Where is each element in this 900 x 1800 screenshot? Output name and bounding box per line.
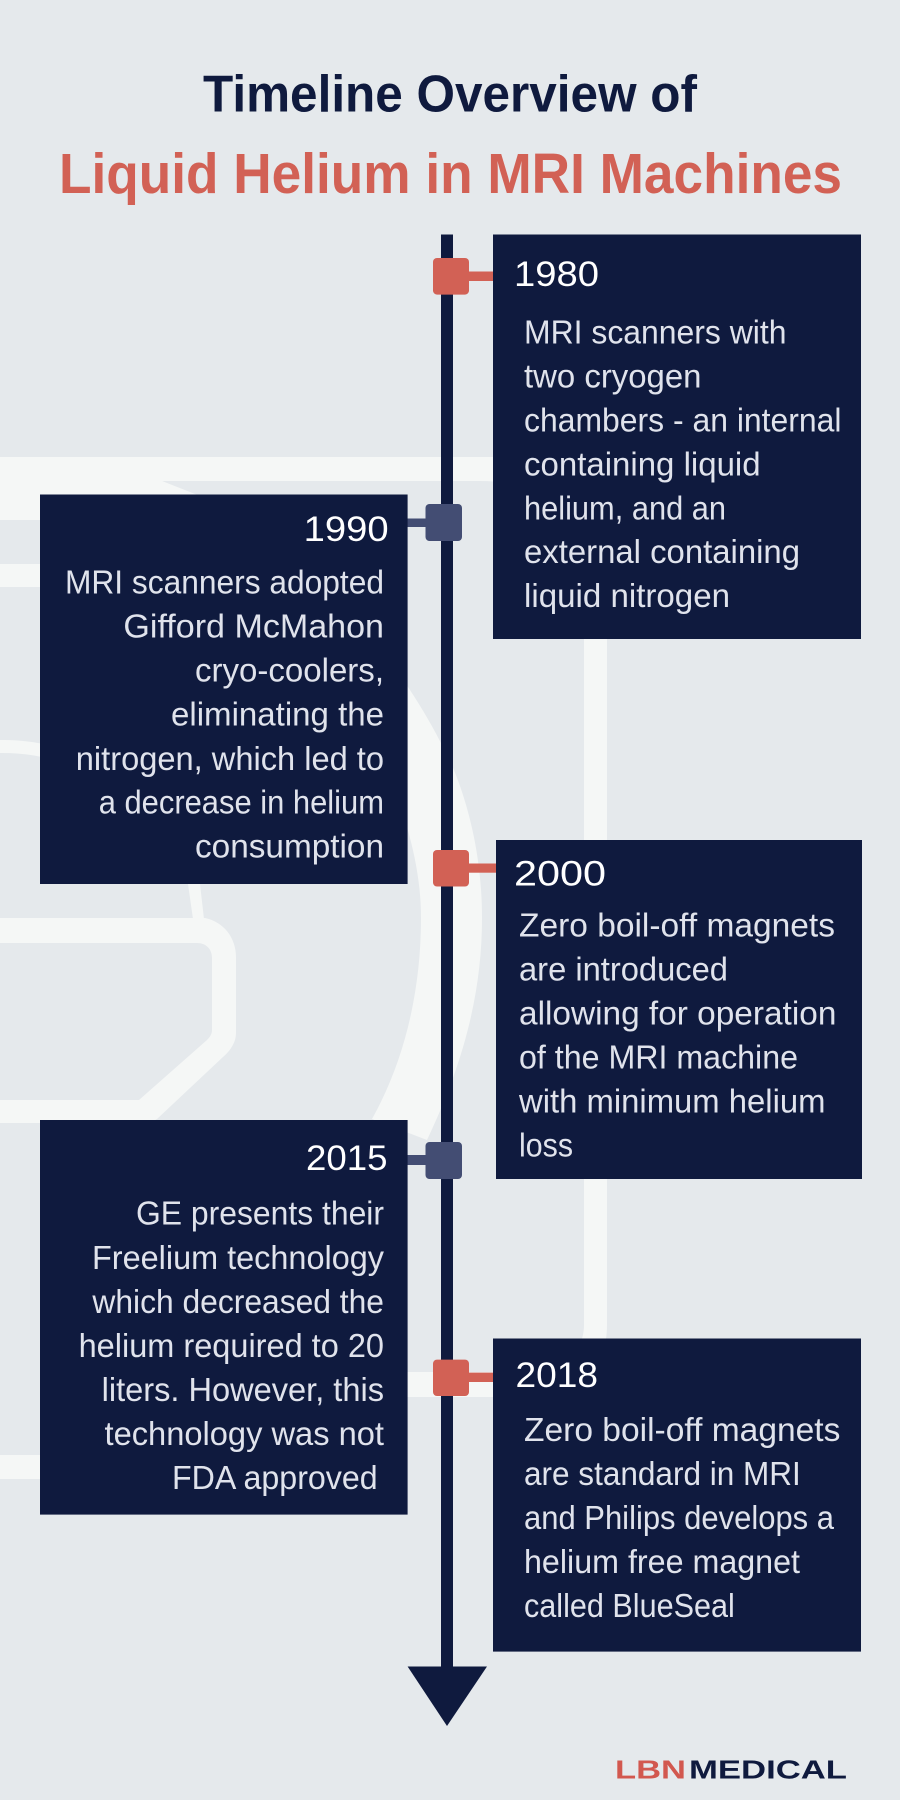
timeline axis with arrow [408,234,487,1726]
panel: 2018: called BlueSeal [524,1587,735,1624]
panel: 2015: which decreased the [91,1283,384,1320]
panel: 2000: Zero boil-off magnets [519,907,835,944]
panel: 2000: with minimum helium [518,1083,826,1120]
logo: LBN Medical [615,1754,847,1784]
logo: LBN Medical: LBN [615,1754,686,1784]
title: Liquid Helium in MRI Machines [59,142,842,206]
panel: 1990: 1990 [304,509,389,549]
panel: 2000: 2000 [514,854,606,894]
panel: 1990: eliminating the [171,696,384,733]
panel: 2000: allowing for operation [519,995,836,1032]
panel: 1990: consumption [195,827,384,864]
logo: LBN Medical: MEDICAL [689,1754,847,1784]
background watermark: faint MRI scanner outline [0,457,607,1479]
panel: 2018 [433,1338,861,1652]
panel: 2018: helium free magnet [524,1543,800,1580]
title [59,66,842,206]
panel: 1980: containing liquid [524,446,761,482]
panel: 1990: nitrogen, which led to [76,740,384,777]
panel: 1980: chambers - an internal [524,402,842,438]
panel: 2015: FDA approved [172,1459,378,1496]
panel: 1990: cryo-coolers, [195,651,384,688]
panel: 1990 [40,494,462,884]
panel: 1990: MRI scanners adopted [65,563,384,600]
panel: 1980 [433,234,861,639]
panel: 2015: helium required to 20 [79,1327,384,1364]
panel: 2000: are introduced [519,951,728,988]
panel: 1980: external containing [524,533,800,570]
panel: 1980: MRI scanners with [524,313,786,350]
panel: 2018: Zero boil-off magnets [524,1411,840,1448]
panel: 2015: technology was not [104,1415,384,1452]
title: Timeline Overview of [203,66,698,124]
panel: 1980: two cryogen [524,358,702,394]
panel: 2018: are standard in MRI [524,1455,801,1492]
panel: 2000: of the MRI machine [519,1039,798,1076]
panel: 2015: GE presents their [136,1195,384,1232]
panel: 2015: Freelium technology [92,1239,384,1276]
panel: 2015 [40,1120,462,1515]
panel: 2015: liters. However, this [102,1371,384,1408]
panel: 2018: and Philips develops a [524,1499,835,1536]
panel: 1980: 1980 [514,254,599,294]
panel: 2000 [433,840,862,1179]
panel: 1990: Gifford McMahon [123,608,384,645]
panel: 2015: 2015 [306,1138,388,1178]
panel: 2018: 2018 [516,1355,598,1395]
panel: 2000: loss [519,1127,573,1164]
panel: 1980: helium, and an [524,489,726,526]
panel: 1980: liquid nitrogen [524,577,730,614]
panel: 1990: a decrease in helium [99,784,384,821]
